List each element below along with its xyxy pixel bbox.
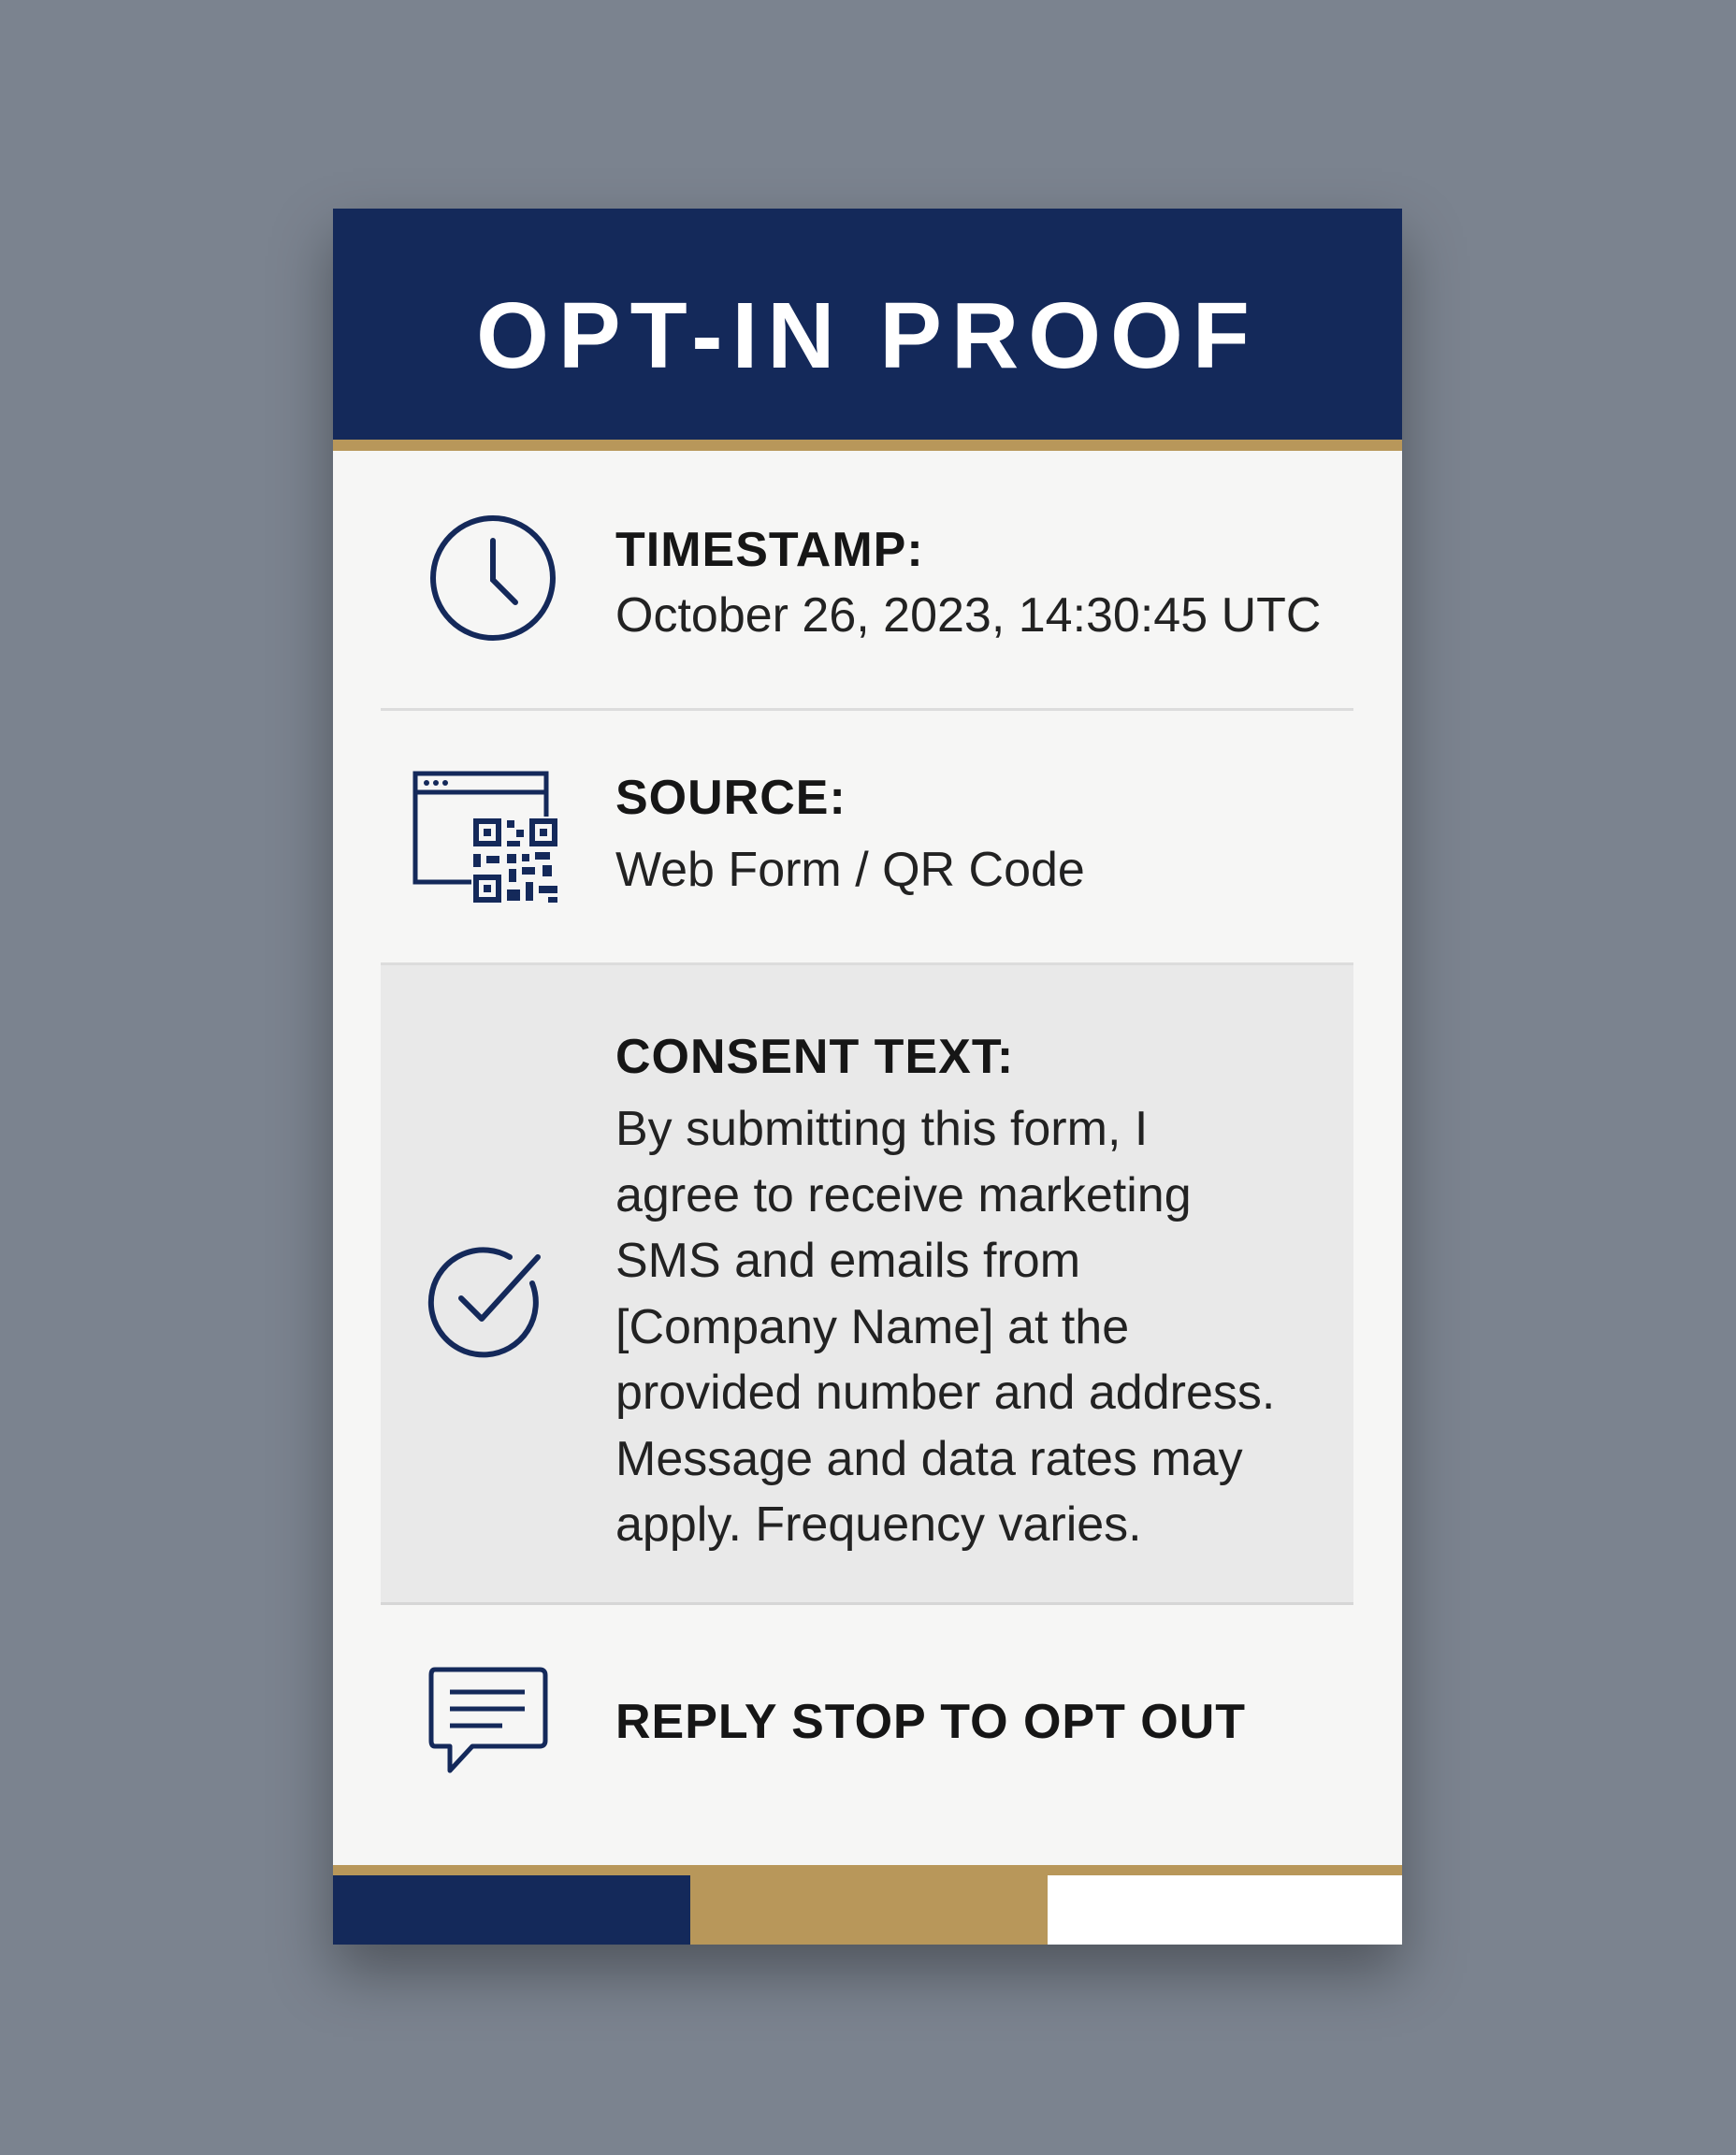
row: timestamp [430, 515, 1321, 643]
text: source [615, 771, 1085, 897]
text: timestamp [615, 523, 1321, 643]
text: consent: Message and data rates may [615, 1431, 1243, 1485]
text: consent: provided number and address. [615, 1366, 1275, 1420]
icon: clock [430, 515, 556, 641]
row: reply stop [428, 1667, 1246, 1773]
text: reply stop: REPLY STOP TO OPT OUT [615, 1695, 1246, 1749]
text: consent: By submitting this form, I [615, 1102, 1148, 1156]
text: timestamp: TIMESTAMP: [615, 523, 924, 577]
header [333, 209, 1402, 440]
icon: chat bubble [428, 1667, 548, 1773]
icon: browser with QR [413, 771, 557, 903]
text: source: Web Form / QR Code [615, 843, 1085, 897]
panel: consent text [381, 962, 1353, 1605]
card [333, 209, 1402, 1945]
icon: check circle [428, 1247, 541, 1358]
text: consent: apply. Frequency varies. [615, 1497, 1142, 1552]
row: source [413, 771, 1085, 903]
text: consent: SMS and emails from [615, 1234, 1080, 1288]
text: consent [615, 1030, 1275, 1552]
text: consent: CONSENT TEXT: [615, 1030, 1014, 1084]
title: OPT-IN PROOF [476, 283, 1259, 388]
text: source: SOURCE: [615, 771, 846, 825]
footer bars [333, 1865, 1402, 1945]
text: consent: agree to receive marketing [615, 1167, 1192, 1222]
text: consent: [Company Name] at the [615, 1300, 1129, 1354]
text: timestamp: October 26, 2023, 14:30:45 UTC [615, 588, 1321, 643]
